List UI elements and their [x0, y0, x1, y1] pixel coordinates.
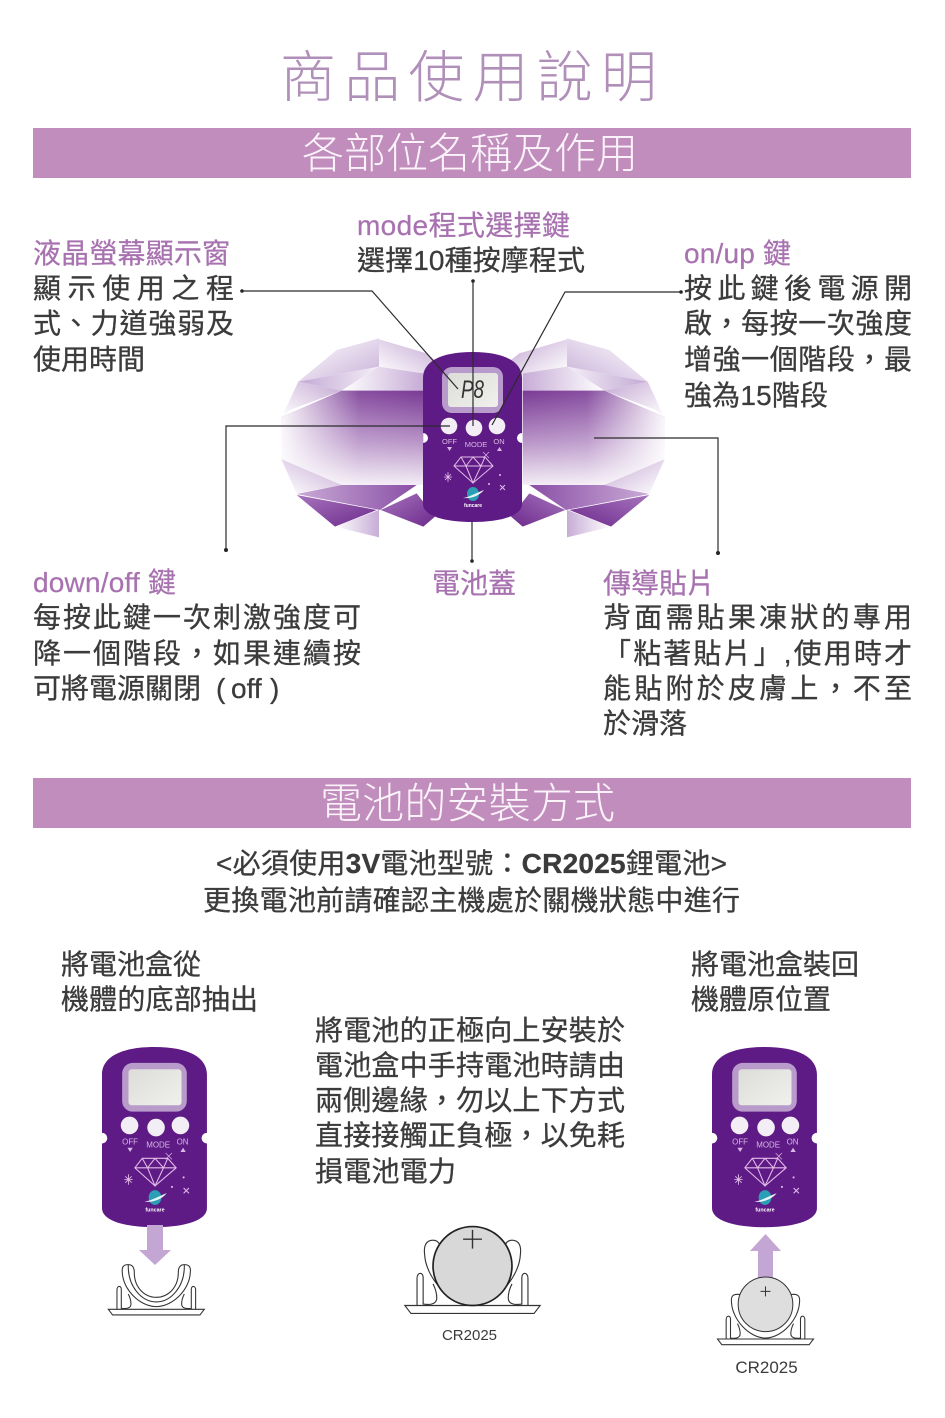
step 3 text: 將電池盒裝回	[691, 949, 859, 980]
label: CR2025: CR2025	[442, 1327, 497, 1344]
text block: on/up key: 啟，每按一次強度	[684, 308, 912, 339]
right gem pad	[511, 338, 665, 537]
battery in holder, right	[718, 1277, 813, 1345]
leader line: mode	[471, 279, 475, 426]
step 1 device: MODE	[146, 1141, 170, 1150]
text block: on/up key: 強為15階段	[684, 380, 828, 411]
section band: parts and functions	[33, 128, 911, 178]
text block: conductive pad: 「粘著貼片」,使用時才	[603, 638, 912, 669]
left gem pad	[281, 338, 435, 537]
text: battery cover: 電池蓋	[432, 568, 516, 599]
text block: down/off key: 降一個階段，如果連續按	[33, 638, 361, 669]
section band: battery installation: 電池的安裝方式	[320, 780, 615, 827]
arrow: up	[750, 1234, 781, 1282]
step 2 text: 直接接觸正負極，以免耗	[315, 1120, 625, 1151]
battery in holder	[405, 1227, 540, 1313]
text block: conductive pad: 能貼附於皮膚上，不至	[603, 673, 912, 704]
battery notice: <必須使用3V電池型號：CR2025鋰電池>	[216, 848, 727, 879]
label: CR2025 right: CR2025	[735, 1358, 798, 1377]
step 3 device	[712, 1047, 817, 1227]
step 2 text: 將電池的正極向上安裝於	[315, 1015, 625, 1046]
step 1 device: OFF	[122, 1138, 138, 1147]
step 1 device: ON	[177, 1138, 189, 1147]
leader line: conductive pad	[594, 438, 720, 555]
text block: LCD display	[33, 238, 234, 375]
device body	[423, 352, 522, 522]
text block: mode key	[357, 210, 585, 276]
arrow: down	[139, 1225, 171, 1265]
step 2 text: 兩側邊緣，勿以上下方式	[315, 1085, 625, 1116]
step 2 text	[315, 1015, 625, 1187]
leader line: display	[240, 289, 458, 389]
device body: ON	[493, 437, 505, 446]
text block: conductive pad: 背面需貼果凍狀的專用	[603, 602, 912, 633]
device body: OFF	[442, 437, 457, 446]
text block: on/up key: 按此鍵後電源開	[684, 273, 912, 304]
text block: LCD display: 式、力道強弱及	[33, 308, 234, 339]
leader line: on/up	[492, 290, 683, 425]
text block: LCD display: 使用時間	[33, 344, 145, 375]
battery notice: 更換電池前請確認主機處於關機狀態中進行	[203, 885, 740, 916]
title: 商品使用說明	[280, 46, 657, 109]
step 3 text	[691, 949, 859, 1015]
text block: down/off key: 可將電源關閉	[33, 673, 201, 704]
text block: conductive pad	[603, 568, 912, 739]
text block: down/off key: off	[231, 673, 262, 704]
device illustration with gem pads	[281, 338, 665, 537]
device body: MODE	[465, 440, 487, 449]
text block: down/off key	[33, 567, 361, 704]
step 2 text: 損電池電力	[315, 1156, 456, 1187]
device body: P8	[461, 376, 484, 404]
step 3 device: MODE	[756, 1141, 780, 1150]
step 1 device	[102, 1047, 207, 1227]
text block: mode key: mode程式選擇鍵	[357, 210, 570, 241]
empty battery holder	[108, 1265, 204, 1315]
text block: conductive pad: 傳導貼片	[603, 568, 715, 599]
leader line: down/off	[224, 426, 450, 552]
step 3 device: ON	[787, 1138, 799, 1147]
step 1 device: funcare	[145, 1207, 165, 1213]
step 3 device: OFF	[732, 1138, 748, 1147]
step 1 text: 將電池盒從	[61, 949, 201, 980]
step 3 device: funcare	[755, 1207, 775, 1213]
step 1 text: 機體的底部抽出	[61, 984, 258, 1015]
text block: down/off key: (	[216, 673, 226, 704]
text block: down/off key: )	[270, 673, 279, 704]
text block: down/off key: down/off 鍵	[33, 567, 176, 598]
text block: conductive pad: 於滑落	[603, 708, 687, 739]
text block: on/up key	[684, 238, 912, 411]
device body: funcare	[464, 503, 482, 509]
text block: on/up key: on/up 鍵	[684, 238, 791, 269]
text block: mode key: 選擇10種按摩程式	[357, 245, 585, 276]
battery notice	[203, 848, 740, 916]
step 1 text	[61, 949, 258, 1015]
step 3 text: 機體原位置	[691, 984, 831, 1015]
text block: down/off key: 每按此鍵一次刺激強度可	[33, 602, 361, 633]
leader line: battery cover	[470, 522, 474, 563]
section band: parts and functions: 各部位名稱及作用	[302, 130, 638, 177]
text block: LCD display: 顯示使用之程	[33, 273, 234, 304]
step 2 text: 電池盒中手持電池時請由	[315, 1050, 625, 1081]
text block: on/up key: 增強一個階段，最	[684, 344, 912, 375]
section band: battery installation	[33, 778, 911, 828]
text block: LCD display: 液晶螢幕顯示窗	[33, 238, 230, 269]
